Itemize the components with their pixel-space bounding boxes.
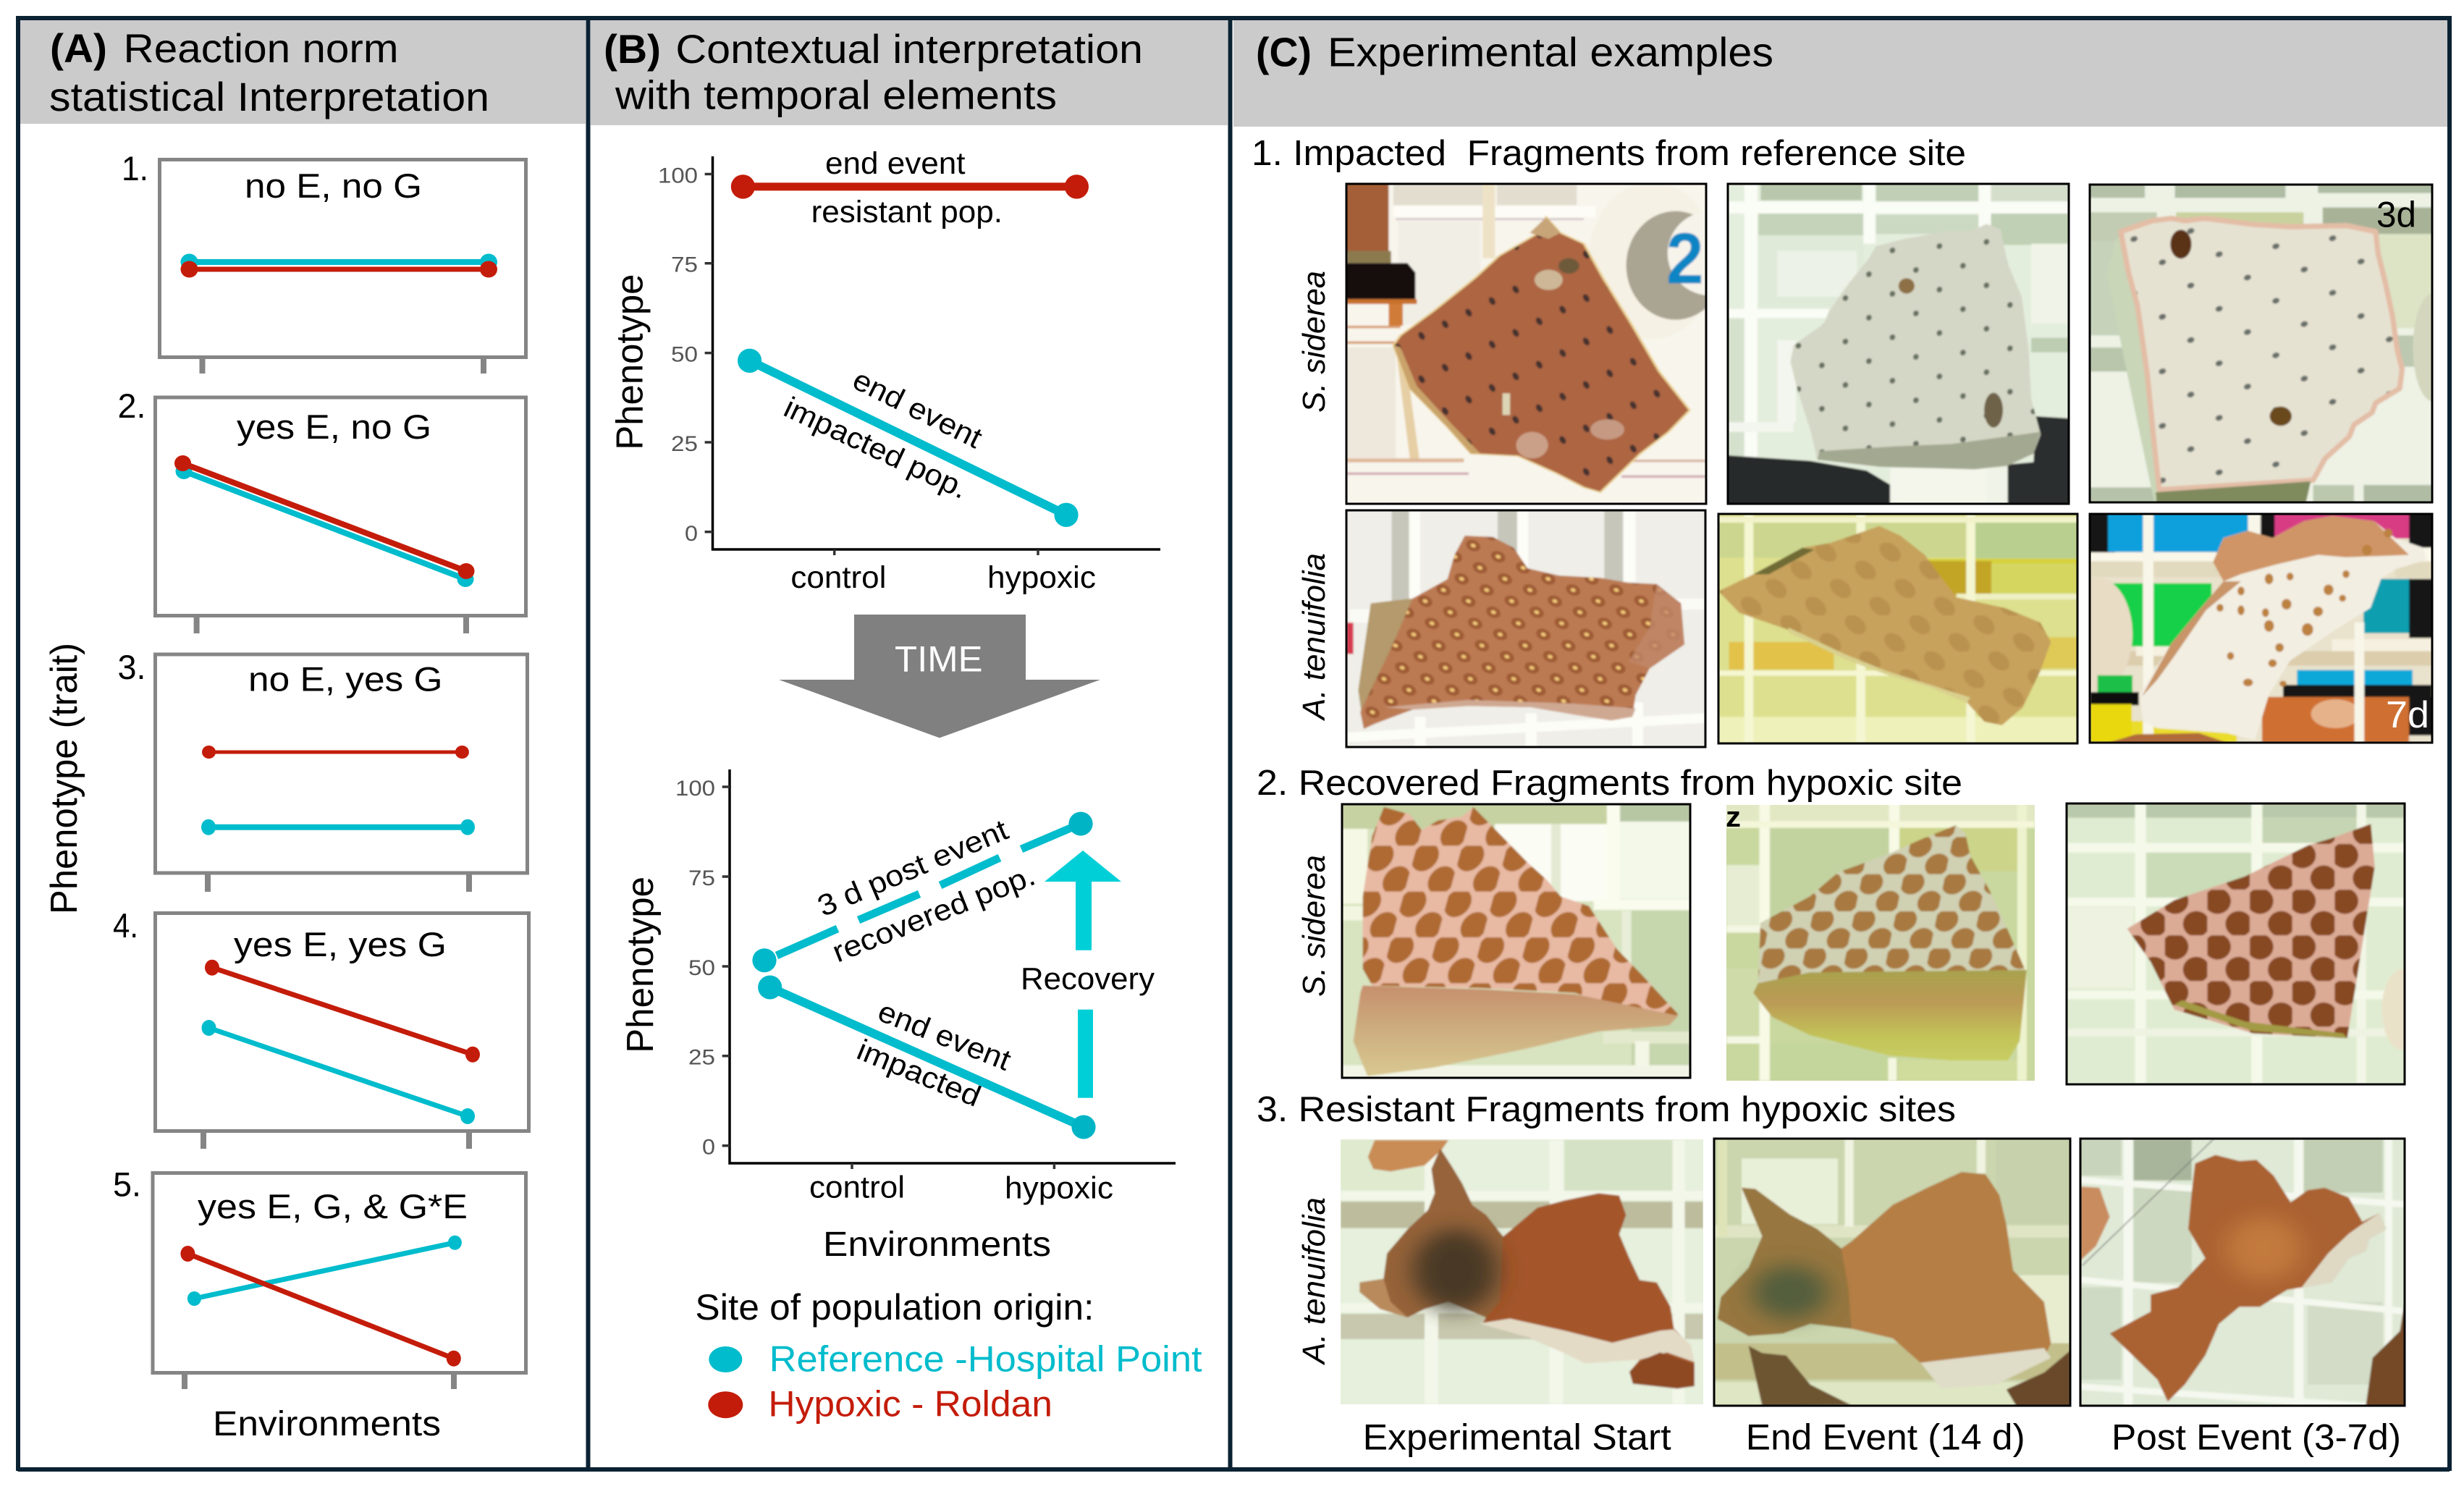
photo: S. siderea impacted post event 3d bbox=[2083, 179, 2454, 509]
legend: site of population origin bbox=[695, 1287, 1202, 1425]
photo: A. tenuifolia resistant start bbox=[1325, 1133, 1715, 1410]
caption: experimental start: Experimental Start bbox=[1363, 1417, 1671, 1458]
stray letter z: z bbox=[1726, 801, 1741, 833]
photo: A. tenuifolia resistant end event bbox=[1700, 1132, 2085, 1412]
plot 2: yes E, no G bbox=[117, 387, 526, 633]
heading B: Contextual interpretation bbox=[675, 26, 1143, 72]
lower chart: recovery phenotype: Environments bbox=[823, 1225, 1051, 1264]
photo: S. siderea impacted end event bbox=[1716, 176, 2083, 514]
plot 4: yes E, yes G: 4. bbox=[113, 906, 138, 945]
arrow: time: TIME bbox=[895, 639, 983, 680]
lower chart: recovery phenotype: 75 bbox=[688, 866, 715, 890]
species label: S. siderea row 3: S. siderea bbox=[1296, 855, 1332, 997]
species label: A. tenuifolia row 2: A. tenuifolia bbox=[1296, 553, 1332, 722]
photo label 3d: 3d bbox=[2376, 194, 2416, 235]
plot 5: yes E, G, and G*E: yes E, G, & G*E bbox=[198, 1187, 468, 1225]
panel C header band bbox=[1233, 20, 2448, 127]
caption: end event: End Event (14 d) bbox=[1746, 1417, 2025, 1458]
plot 4: yes E, yes G bbox=[113, 906, 528, 1149]
upper chart: end event phenotype: Phenotype bbox=[609, 274, 651, 450]
lower chart: recovery phenotype: recovered pop. bbox=[827, 858, 1039, 969]
photo: A. tenuifolia resistant post event bbox=[2062, 1132, 2423, 1412]
heading C: Experimental examples bbox=[1328, 30, 1773, 76]
lower chart: recovery phenotype: Phenotype bbox=[620, 877, 662, 1053]
plot 1: no E, no G: 1. bbox=[122, 149, 148, 187]
upper chart: end event phenotype: 0 bbox=[685, 522, 698, 546]
plot 5: yes E, G, and G*E: 5. bbox=[113, 1165, 141, 1204]
heading A: Reaction norm bbox=[123, 25, 398, 71]
lower chart: recovery phenotype: 25 bbox=[688, 1046, 715, 1070]
lower chart: recovery phenotype: end event bbox=[874, 995, 1016, 1077]
upper chart: end event phenotype: 50 bbox=[671, 343, 698, 367]
plot 3: no E, yes G: 3. bbox=[117, 648, 146, 686]
lower chart: recovery phenotype: 50 bbox=[688, 956, 715, 980]
panel A header band bbox=[20, 20, 586, 124]
heading C: (C) bbox=[1256, 30, 1312, 76]
upper chart: end event phenotype: hypoxic bbox=[987, 560, 1096, 595]
heading B: (B) bbox=[604, 26, 661, 72]
heading A bbox=[49, 25, 489, 119]
plot 4: yes E, yes G: yes E, yes G bbox=[234, 925, 447, 963]
legend: site of population origin: Hypoxic - Roldan bbox=[768, 1384, 1052, 1425]
species label: A. tenuifolia row 4: A. tenuifolia bbox=[1296, 1197, 1332, 1366]
plot 5: yes E, G, and G*E bbox=[113, 1165, 526, 1389]
panel A: reaction norm statistical interpretation bbox=[18, 18, 588, 1469]
lower chart: recovery phenotype: control bbox=[809, 1170, 905, 1205]
photo: S. siderea recovered start bbox=[1330, 800, 1702, 1082]
plot 2: yes E, no G: 2. bbox=[117, 387, 146, 425]
section heading 3: 3. Resistant Fragments from hypoxic sites bbox=[1257, 1090, 1956, 1129]
heading B: with temporal elements bbox=[615, 72, 1057, 118]
heading A: statistical Interpretation bbox=[49, 74, 489, 119]
plot 3: no E, yes G bbox=[117, 648, 527, 892]
lower chart: recovery phenotype bbox=[620, 769, 1176, 1264]
section heading 1: 1. Impacted Fragments from reference site bbox=[1252, 134, 1966, 173]
photo: A. tenuifolia impacted end event bbox=[1705, 509, 2096, 748]
plot 2: yes E, no G: yes E, no G bbox=[237, 408, 431, 446]
arrow: time bbox=[779, 615, 1100, 738]
upper chart: end event phenotype bbox=[609, 146, 1160, 595]
panel C: experimental examples bbox=[1233, 18, 2454, 1469]
photo: S. siderea impacted start bbox=[1330, 176, 1754, 514]
upper chart: end event phenotype: end event bbox=[848, 363, 988, 455]
arrow: recovery: Recovery bbox=[1021, 962, 1155, 997]
photo: S. siderea recovered post event bbox=[2049, 796, 2426, 1091]
lower chart: recovery phenotype: 3 d post event bbox=[813, 813, 1013, 923]
lower chart: recovery phenotype: hypoxic bbox=[1005, 1171, 1113, 1206]
upper chart: end event phenotype: impacted pop. bbox=[779, 390, 974, 505]
upper chart: end event phenotype: end event bbox=[825, 146, 966, 181]
section heading 2: 2. Recovered Fragments from hypoxic site bbox=[1257, 764, 1962, 803]
heading A: (A) bbox=[50, 25, 107, 71]
legend: site of population origin: Reference -Hospital Point bbox=[769, 1339, 1202, 1380]
plot 3: no E, yes G: no E, yes G bbox=[248, 660, 443, 698]
upper chart: end event phenotype: control bbox=[790, 560, 886, 595]
species label: S. siderea row 1: S. siderea bbox=[1296, 271, 1332, 413]
photo: A. tenuifolia impacted start bbox=[1329, 507, 1719, 751]
lower chart: recovery phenotype: 100 bbox=[675, 777, 715, 801]
lower chart: recovery phenotype: impacted bbox=[853, 1033, 986, 1113]
upper chart: end event phenotype: 25 bbox=[671, 432, 698, 456]
x axis label: environments: Environments bbox=[213, 1405, 441, 1443]
upper chart: end event phenotype: 75 bbox=[671, 253, 698, 277]
upper chart: end event phenotype: 100 bbox=[658, 164, 698, 188]
photo label 7d: 7d bbox=[2386, 694, 2429, 736]
photo: S. siderea recovered end event bbox=[1716, 800, 2046, 1084]
photo: S. siderea impacted start: 2 bbox=[1666, 218, 1704, 299]
arrow: recovery bbox=[1021, 851, 1155, 1098]
heading B bbox=[604, 26, 1143, 118]
upper chart: end event phenotype: resistant pop. bbox=[811, 195, 1003, 229]
lower chart: recovery phenotype: 0 bbox=[702, 1136, 715, 1160]
panel B header band bbox=[591, 20, 1228, 125]
legend: site of population origin: Site of population origin: bbox=[695, 1287, 1094, 1328]
y axis label: phenotype trait: Phenotype (trait) bbox=[43, 643, 85, 914]
plot 1: no E, no G bbox=[122, 149, 526, 374]
plot 1: no E, no G: no E, no G bbox=[245, 166, 422, 205]
photo: A. tenuifolia impacted post event 7d bbox=[2062, 509, 2451, 748]
caption: post event: Post Event (3-7d) bbox=[2111, 1417, 2401, 1458]
panel B: contextual interpretation with temporal elements bbox=[591, 18, 1228, 1469]
